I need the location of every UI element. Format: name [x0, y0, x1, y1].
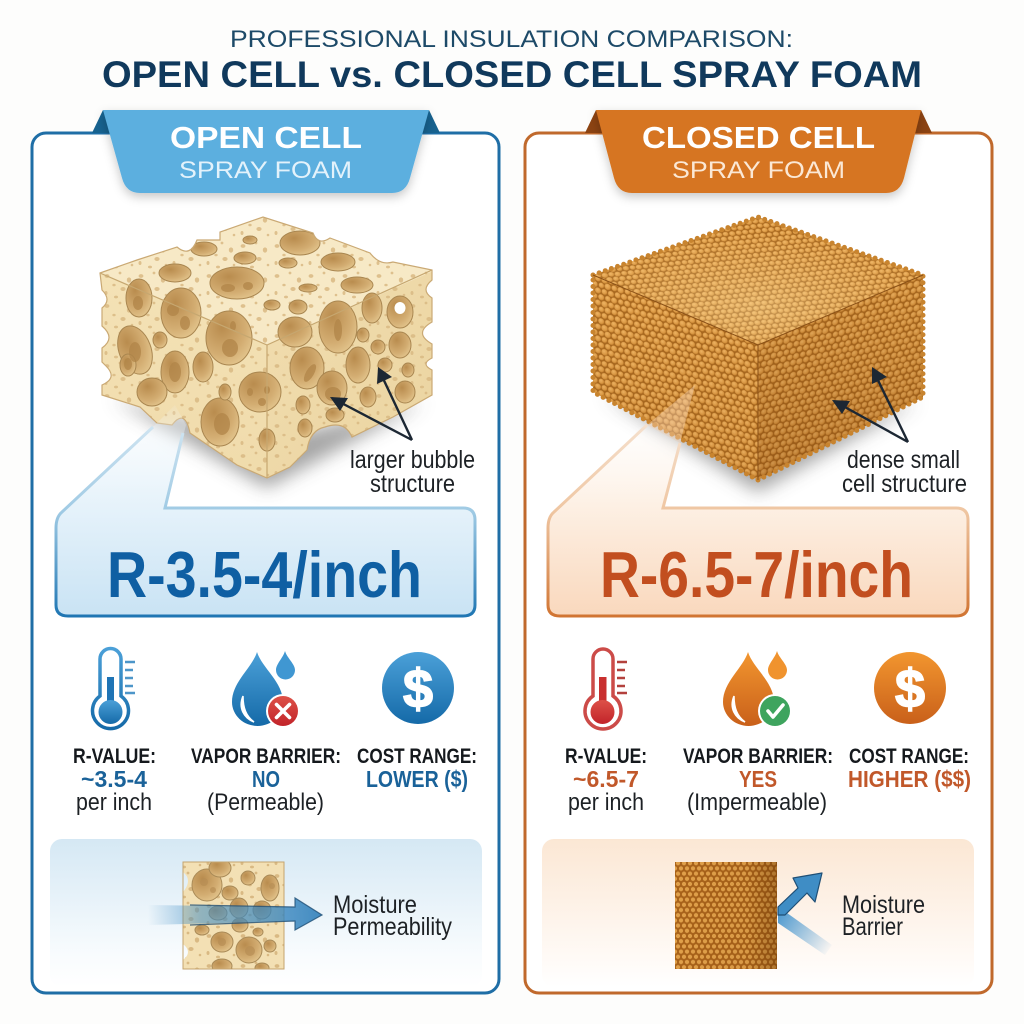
bumpy edge [593, 217, 923, 480]
ribbon header: open cell [92, 110, 440, 193]
illustration: open cell foam cube [90, 210, 440, 488]
arrow: moisture passes through [148, 898, 322, 930]
stat: cost range: LOWER ($) [366, 766, 468, 792]
icon: dollar coin (blue): $ [403, 659, 433, 719]
label: moisture permeability: Permeability [333, 913, 452, 941]
callout label: larger bubble structure: larger bubble [350, 446, 475, 474]
foam sample: open cell [183, 859, 284, 973]
ribbon subtitle: SPRAY FOAM [179, 157, 352, 184]
stat: r-value: R-VALUE: [565, 745, 647, 768]
stat: cost range: COST RANGE: [849, 745, 969, 768]
callout label: dense small cell structure: dense small [847, 446, 960, 474]
icon: dollar coin (orange) [874, 652, 946, 724]
stat: vapor barrier [683, 745, 833, 816]
ribbon title: OPEN CELL [170, 120, 362, 155]
right face [758, 275, 923, 480]
title [102, 26, 922, 95]
illustration: closed cell foam cube [593, 217, 923, 492]
stat: r-value: per inch [568, 789, 644, 816]
stat: vapor barrier [191, 745, 341, 816]
stat: r-value: per inch [76, 789, 152, 816]
stat: cost range: COST RANGE: [357, 745, 477, 768]
icon: dollar coin (orange): $ [895, 659, 925, 719]
icon: dollar coin (blue) [382, 652, 454, 724]
ribbon subtitle: SPRAY FOAM [672, 157, 845, 184]
ribbon header: closed cell [585, 110, 932, 193]
stat: vapor barrier: YES [739, 766, 777, 792]
callout arrows: larger bubble structure [330, 367, 412, 440]
label: moisture barrier [842, 891, 925, 941]
icon: thermometer (blue) [93, 648, 135, 729]
label: moisture permeability: Moisture [333, 891, 417, 919]
moisture permeability band [50, 839, 482, 970]
translucent pointer [647, 385, 695, 443]
stat: cost range [848, 745, 971, 792]
callout label: larger bubble structure [350, 446, 475, 498]
callout label: dense small cell structure: cell structure [842, 470, 967, 498]
top face [593, 217, 923, 345]
panel: closed cell [525, 110, 992, 993]
callout label: larger bubble structure: structure [370, 470, 455, 498]
stat: cost range [357, 745, 477, 792]
left face [593, 275, 758, 480]
stat: vapor barrier: VAPOR BARRIER: [191, 745, 341, 768]
ribbon title: CLOSED CELL [642, 120, 875, 155]
stat: cost range: HIGHER ($$) [848, 766, 971, 792]
stat: vapor barrier: NO [252, 766, 280, 792]
stat: r-value: ~3.5-4 [81, 766, 147, 792]
R-value callout box: open cell [56, 405, 475, 616]
label: moisture barrier: Moisture [842, 891, 925, 919]
stat: vapor barrier: (Impermeable) [687, 789, 827, 816]
foam sample: closed cell [675, 862, 777, 969]
label: moisture barrier: Barrier [842, 913, 903, 941]
stat: r-value [565, 745, 647, 816]
R-value callout box: closed cell [548, 425, 968, 616]
see-through hole [394, 302, 406, 314]
icon: thermometer (red) [585, 649, 627, 729]
arrow: moisture deflected [778, 873, 832, 955]
stat: vapor barrier: VAPOR BARRIER: [683, 745, 833, 768]
stat: vapor barrier: (Permeable) [207, 789, 324, 816]
title line 2: OPEN CELL vs. CLOSED CELL SPRAY FOAM [102, 54, 922, 95]
stat: r-value: R-VALUE: [73, 745, 156, 768]
big R-value: R-6.5-7/inch [600, 538, 913, 611]
label: moisture permeability [333, 891, 452, 941]
big R-value: R-3.5-4/inch [107, 538, 422, 611]
callout arrows: dense small cell structure [832, 367, 908, 442]
callout label: dense small cell structure [842, 446, 967, 498]
moisture barrier band [542, 839, 974, 987]
title line 1: PROFESSIONAL INSULATION COMPARISON: [230, 26, 793, 53]
stat: r-value: ~6.5-7 [573, 766, 639, 792]
icon: water drop with green check [723, 651, 792, 728]
icon: water drop with red x [232, 651, 300, 728]
panel: open cell [32, 110, 499, 993]
panel frame [525, 133, 992, 993]
stat: r-value [73, 745, 156, 816]
panel frame [32, 133, 499, 993]
